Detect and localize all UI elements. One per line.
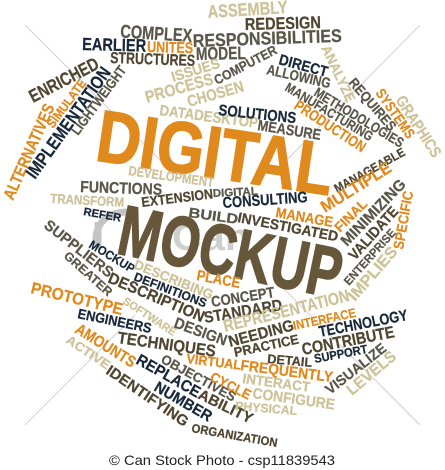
word: REPRESENTATION: REPRESENTATION: [221, 286, 351, 336]
word: FREQUENTLY: FREQUENTLY: [239, 357, 334, 386]
word: MINIMIZING: MINIMIZING: [338, 176, 410, 250]
word: ALLOWING: ALLOWING: [265, 62, 332, 92]
word: ENGINEERS: ENGINEERS: [76, 305, 153, 336]
word: VIRTUAL: VIRTUAL: [186, 351, 242, 373]
word: REPLACE: REPLACE: [133, 352, 203, 402]
word: DIGITAL (small): DIGITAL: [213, 186, 258, 200]
word: LIGHTWEIGHT: LIGHTWEIGHT: [68, 62, 130, 138]
word: ISSUES: ISSUES: [169, 56, 222, 86]
word: ALTERNATIVES: ALTERNATIVES: [0, 101, 59, 203]
word: PROCESS: PROCESS: [143, 69, 215, 107]
word: PRACTICE: PRACTICE: [233, 332, 300, 360]
word: COMPUTER: COMPUTER: [211, 42, 280, 88]
word: TRANSFORM: TRANSFORM: [50, 191, 125, 210]
word: REDESIGN: REDESIGN: [245, 13, 321, 34]
word: GREATER: GREATER: [61, 249, 115, 299]
word: CONFIGURE: CONFIGURE: [251, 385, 336, 414]
word: SUPPLIERS: SUPPLIERS: [41, 217, 116, 281]
word: AMOUNTS: AMOUNTS: [72, 321, 139, 372]
word: PROTOTYPE: PROTOTYPE: [29, 278, 125, 319]
word: FUNCTIONS: FUNCTIONS: [80, 179, 163, 199]
word: CONCEPT: CONCEPT: [210, 284, 276, 311]
word: ENTERPRISE: ENTERPRISE: [341, 226, 399, 288]
word: EARLIER: EARLIER: [82, 34, 147, 56]
word: MANUFACTURING: MANUFACTURING: [282, 80, 376, 144]
credit line: © Can Stock Photo - csp11839543: [109, 452, 335, 468]
word: REQUIRES: REQUIRES: [346, 75, 400, 134]
word: SYSTEMS: SYSTEMS: [372, 86, 418, 142]
word: NUMBER: NUMBER: [151, 379, 215, 425]
word: MANAGEABLE: MANAGEABLE: [332, 145, 408, 196]
word: ACTIVE: ACTIVE: [63, 332, 114, 373]
word: UNITES: UNITES: [147, 39, 193, 57]
word: DATADESKTOP: DATADESKTOP: [158, 102, 259, 132]
word: ANALYZE: ANALYZE: [318, 42, 359, 104]
word: DESIGN: DESIGN: [172, 315, 229, 350]
word: IMPLIES: IMPLIES: [345, 243, 402, 305]
word: MODEL: MODEL: [196, 43, 246, 64]
watermark: diagonal lines and grey Can Stock logo: Can: [172, 217, 250, 259]
word: TECHNOLOGY: TECHNOLOGY: [318, 307, 410, 341]
word: SIMULATE: SIMULATE: [43, 76, 90, 131]
word: DEVELOPMENT: DEVELOPMENT: [128, 163, 216, 190]
word: INVESTIGATED: INVESTIGATED: [236, 210, 339, 245]
word: REFER: REFER: [82, 206, 122, 225]
word: DEFINITIONS: DEFINITIONS: [132, 270, 209, 310]
word: CHOSEN: CHOSEN: [185, 79, 246, 111]
word: FINAL: FINAL: [331, 195, 371, 235]
word: TECHNIQUES: TECHNIQUES: [116, 328, 217, 361]
watermark: diagonal lines and grey Can Stock logo: [25, 25, 420, 425]
word: VISUALIZE: VISUALIZE: [323, 340, 390, 398]
word: MOCKUP: MOCKUP: [112, 191, 349, 314]
word: ORGANIZATION: ORGANIZATION: [190, 421, 279, 450]
word: CONTRIBUTE: CONTRIBUTE: [300, 322, 396, 359]
word: IMPLEMENTATION: IMPLEMENTATION: [22, 63, 115, 182]
word: DESCRIPTION: DESCRIPTION: [105, 270, 207, 326]
word: SPECIFIC: SPECIFIC: [391, 190, 417, 251]
word: VALIDATE: VALIDATE: [345, 203, 402, 264]
word: ABILITY: ABILITY: [195, 386, 256, 427]
word: DIGITAL: DIGITAL: [92, 96, 339, 211]
word: SUPPORT: SUPPORT: [313, 342, 369, 366]
word: DIRECT: DIRECT: [277, 51, 330, 81]
word: CONSULTING: CONSULTING: [222, 189, 308, 212]
word: SOFTWARE: SOFTWARE: [120, 295, 178, 339]
word: PLACE: PLACE: [195, 267, 242, 292]
word: BUILD: BUILD: [188, 204, 239, 227]
word: NEEDING: NEEDING: [227, 317, 296, 351]
word: PHYSICAL: PHYSICAL: [235, 399, 298, 418]
word: INTERFACE: INTERFACE: [292, 305, 358, 333]
word: DESCRIBING: DESCRIBING: [132, 257, 215, 302]
word: OBJECTIVES: OBJECTIVES: [159, 351, 239, 405]
word: MEASURE: MEASURE: [256, 117, 322, 144]
word: PRODUCTION: PRODUCTION: [291, 97, 369, 156]
word: MANAGE: MANAGE: [274, 205, 335, 231]
word: METHODOLOGIES: METHODOLOGIES: [311, 84, 407, 151]
word: MULTIPLE: MULTIPLE: [317, 158, 395, 216]
word: CYCLE: CYCLE: [208, 368, 254, 403]
word: DETAIL: DETAIL: [267, 351, 313, 370]
word: STANDARD: STANDARD: [203, 297, 284, 327]
word: SOLUTIONS: SOLUTIONS: [218, 102, 297, 127]
word: ENRICHED: ENRICHED: [26, 54, 102, 107]
word: EXTENSION: EXTENSION: [140, 185, 214, 210]
word: INTERACT: INTERACT: [242, 370, 312, 395]
word: MOCKUP (small): MOCKUP: [86, 238, 137, 276]
word: IDENTIFYING: IDENTIFYING: [103, 362, 192, 430]
word: STRUCTURES: STRUCTURES: [110, 50, 196, 70]
word: LEVELS: LEVELS: [344, 348, 400, 399]
word: COMPLEX: COMPLEX: [120, 21, 193, 46]
word: RESPONSIBILITIES: RESPONSIBILITIES: [192, 26, 342, 51]
